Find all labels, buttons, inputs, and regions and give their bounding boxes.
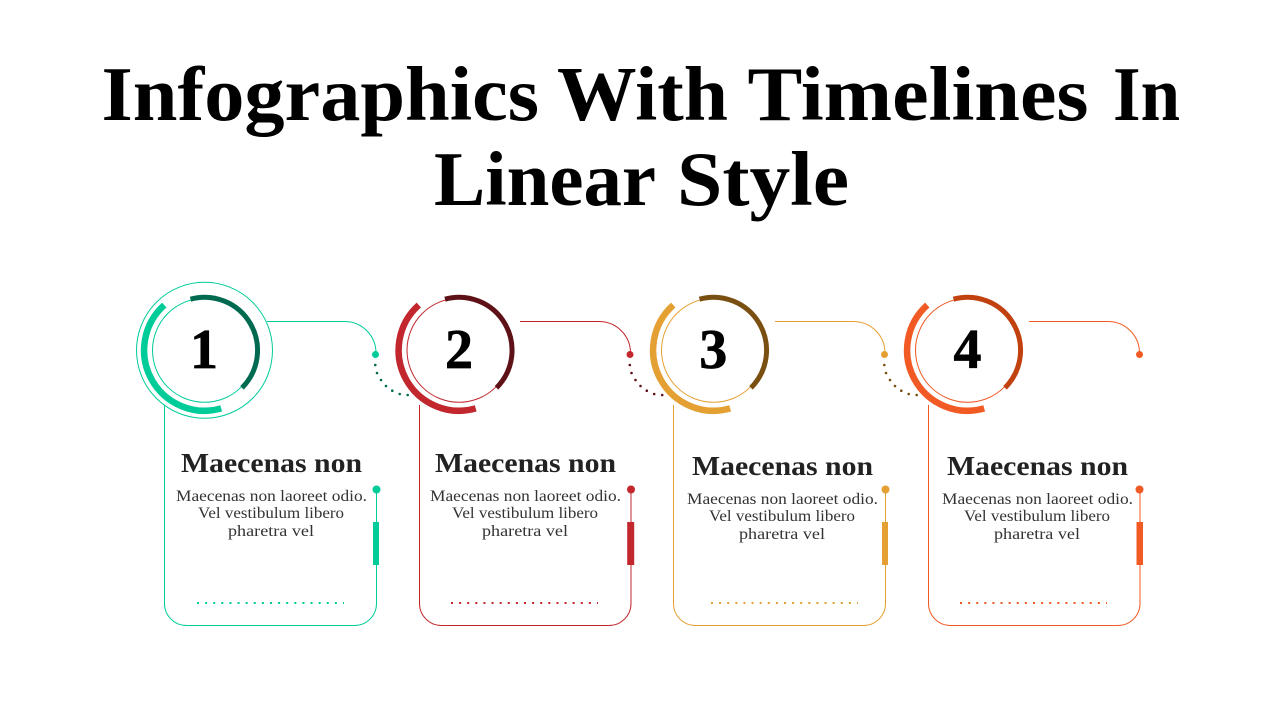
title: With [557, 51, 728, 137]
number ring 4: 4 [954, 319, 982, 381]
side marker 3 [882, 486, 890, 565]
side marker 4 [1136, 486, 1144, 565]
dotted arc 3 [883, 364, 918, 396]
body text 4: pharetra vel [994, 526, 1081, 543]
card outline 1 [164, 405, 376, 626]
title: Style [677, 136, 849, 222]
number ring 1: 1 [190, 319, 218, 381]
body text 1 [176, 488, 367, 540]
connector 3 [775, 322, 888, 358]
side marker 1 [372, 486, 380, 565]
title: Timelines [748, 51, 1088, 137]
panel: step 4 [907, 297, 1144, 626]
body text 2: pharetra vel [482, 523, 569, 540]
panel: step 1 [136, 282, 409, 626]
heading 2: Maecenas non [435, 448, 616, 478]
body text 2: Maecenas non laoreet odio. [430, 488, 621, 505]
connector 1 [267, 322, 379, 358]
number ring 4 [907, 297, 1021, 411]
card outline 2 [420, 405, 631, 626]
body text 3: Vel vestibulum libero [709, 508, 855, 525]
body text 4: Vel vestibulum libero [964, 508, 1110, 525]
panel: step 3 [653, 297, 918, 626]
number ring 3: 3 [699, 319, 727, 381]
title: Linear [434, 136, 656, 222]
panel: step 2 [399, 297, 664, 626]
title: Infographics [102, 51, 539, 137]
dotted arc 2 [628, 364, 664, 396]
card outline 4 [928, 405, 1140, 626]
dotted line 4 [960, 602, 1107, 604]
card outline 3 [674, 405, 886, 626]
body text 4: Maecenas non laoreet odio. [942, 491, 1133, 508]
heading 3: Maecenas non [692, 451, 873, 481]
heading 1: Maecenas non [181, 448, 362, 478]
body text 3 [687, 491, 878, 543]
number ring 2 [399, 297, 512, 411]
body text 1: Vel vestibulum libero [198, 505, 344, 522]
body text 4 [942, 491, 1133, 543]
dotted line 1 [197, 602, 344, 604]
heading 4: Maecenas non [947, 451, 1128, 481]
body text 3: pharetra vel [739, 526, 826, 543]
dotted arc 1 [374, 364, 409, 396]
title: In [1113, 51, 1180, 137]
dotted line 2 [451, 602, 598, 604]
connector 2 [520, 322, 634, 358]
body text 1: pharetra vel [228, 523, 315, 540]
body text 1: Maecenas non laoreet odio. [176, 488, 367, 505]
number ring 3 [653, 297, 767, 411]
dotted line 3 [711, 602, 858, 604]
body text 2 [430, 488, 621, 540]
body text 2: Vel vestibulum libero [452, 505, 598, 522]
number ring 1 [136, 282, 272, 418]
side marker 2 [627, 486, 635, 565]
title [102, 51, 1180, 222]
body text 3: Maecenas non laoreet odio. [687, 491, 878, 508]
connector 4 [1029, 322, 1143, 358]
number ring 2: 2 [445, 319, 473, 381]
